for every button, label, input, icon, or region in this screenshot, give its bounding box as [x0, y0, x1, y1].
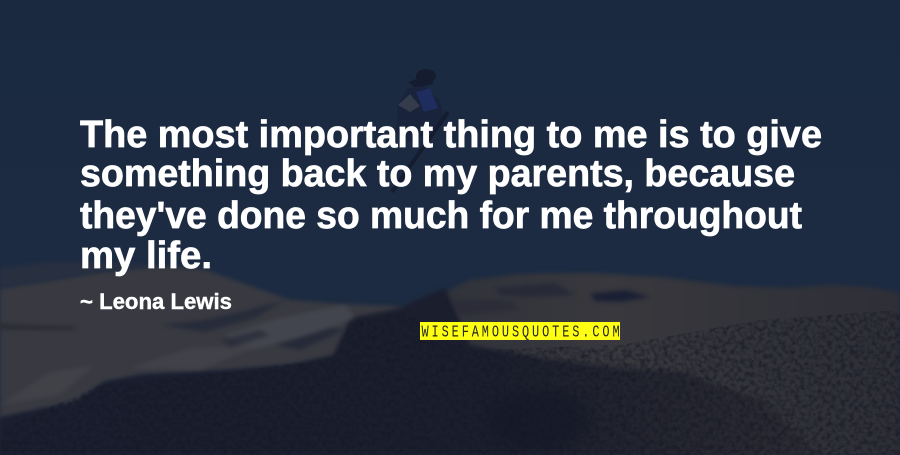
background: dark foreground hollow — [490, 390, 590, 450]
quote line 4: my life. — [80, 235, 212, 277]
background: upper left distant band — [0, 262, 160, 288]
watermark badge: WISEFAMOUSQUOTES.COM — [422, 324, 620, 342]
faint skier silhouette — [392, 69, 448, 192]
background: left mountain snow streaks — [0, 283, 650, 405]
quote line 2: something back to my parents, because — [80, 153, 795, 195]
background: sunlit left mountain — [0, 266, 410, 418]
quote text — [80, 114, 822, 277]
quote line 3: they've done so much for me throughout — [80, 195, 802, 237]
background: shadowed foreground slope — [0, 288, 820, 455]
background: rock texture — [0, 300, 900, 455]
quote line 1: The most important thing to me is to give — [80, 114, 822, 156]
background: distant right hills — [420, 273, 900, 455]
attribution: ~ Leona Lewis — [80, 289, 232, 314]
